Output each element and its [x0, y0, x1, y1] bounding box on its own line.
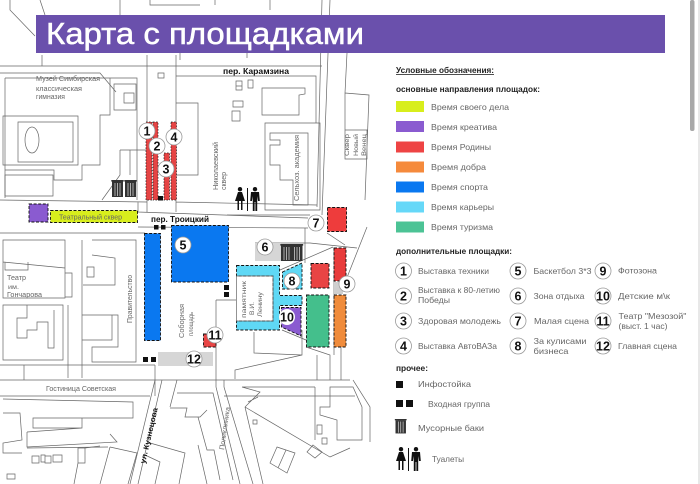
item 7: 7: [515, 314, 522, 328]
item 4: 4: [400, 340, 407, 354]
item 4: [396, 338, 497, 354]
right-centre roads: [227, 215, 367, 355]
zone: red small stage: [328, 208, 346, 232]
marker 7: [308, 215, 324, 231]
subheading: прочее:: [396, 364, 428, 373]
marker 11: 11: [208, 328, 222, 342]
item 2: [396, 285, 501, 305]
item 8: [510, 336, 587, 356]
item 6: [510, 288, 585, 304]
scrollbar: [690, 0, 700, 484]
theatre block: [3, 240, 72, 360]
item: bins: Мусорные баки: [418, 423, 484, 433]
item: motherland: [396, 142, 491, 152]
label: museum line 3: гимназия: [36, 94, 65, 101]
zone: blue square: [172, 226, 228, 282]
legend: other: [395, 364, 490, 471]
label: square Novy Venets: Сквер: [345, 133, 351, 156]
item 9: 9: [600, 264, 607, 278]
legend: additional sites: [396, 247, 686, 356]
item 3: [396, 313, 502, 329]
label: Novy: Новый: [353, 134, 360, 156]
item 1: 1: [400, 264, 407, 278]
zone: grey rest area: [255, 243, 281, 261]
zone: cyan career frame: [236, 266, 302, 330]
item: sport: [396, 182, 488, 192]
marker 6: [257, 239, 273, 255]
lower-left buildings: [3, 399, 185, 484]
item: career: Время карьеры: [431, 202, 494, 212]
item: own business: Время своего дела: [431, 102, 509, 112]
item 5: Баскетбол 3*3: [534, 266, 592, 276]
marker 1: 1: [144, 124, 151, 138]
label: museum line 2: классическая: [36, 86, 82, 93]
label: monument name: Ленину: [257, 291, 264, 317]
item: creative: Время креатива: [431, 122, 497, 132]
item 5: 5: [515, 264, 522, 278]
Nikolaevsky block: [176, 76, 316, 175]
zone: purple polygon: [282, 308, 301, 336]
info squares on map: [143, 196, 229, 362]
item: own business: [396, 101, 509, 112]
zone: red strips: [146, 122, 176, 200]
label: polyclinic: Поликлиника: [219, 407, 232, 450]
bottom roads: [0, 365, 350, 396]
item: tourism: [396, 222, 493, 232]
label: square word: площадь: [189, 312, 195, 336]
label: Kuznetsova street: ул. Кузнецова: [138, 406, 160, 464]
item: sport: Время спорта: [431, 182, 488, 192]
item 9: Фотозона: [618, 266, 657, 276]
item 3: Здоровая молодежь: [418, 316, 502, 326]
item 12: [595, 338, 677, 354]
marker 8: 8: [289, 274, 296, 288]
marker 7: 7: [313, 216, 320, 230]
item 7: Малая сцена: [534, 316, 589, 326]
marker 5: [175, 237, 191, 253]
icon: bins upper: [111, 180, 137, 197]
item 10: [595, 288, 670, 304]
title: [36, 15, 665, 53]
item 12: Главная сцена: [618, 341, 677, 351]
item 4: Выставка АвтоВАЗа: [418, 341, 497, 351]
zone: purple square: [29, 204, 48, 222]
item 2: Выставка к 80-летию: [418, 285, 501, 295]
marker 5: 5: [180, 238, 187, 252]
marker 3: [158, 161, 174, 177]
item: kindness: [396, 162, 486, 172]
item 10: 10: [596, 290, 610, 304]
marker 12: 12: [187, 352, 201, 366]
marker 6: 6: [262, 240, 269, 254]
lower-right block: [242, 387, 350, 484]
marker 4: [166, 129, 182, 145]
item 7: [510, 313, 589, 329]
marker 10: 10: [280, 310, 294, 324]
item 2: Победы: [418, 295, 450, 305]
label: hotel: Гостиница Советская: [46, 386, 116, 393]
legend: main directions: [396, 85, 540, 232]
item 9: [595, 263, 657, 279]
museum block: [5, 78, 137, 200]
icon: toilets on map: [235, 187, 260, 211]
subheading: основные направления площадок:: [396, 85, 540, 94]
item: toilets: Туалеты: [432, 454, 464, 464]
zone: red theatre: [204, 334, 216, 347]
marker 4: 4: [171, 130, 178, 144]
label: theatre: Театр: [7, 275, 26, 282]
marker 1: [139, 123, 155, 139]
label: theatre line 3: Гончарова: [7, 292, 42, 299]
label: agricultural academy: Сельхоз. академия: [294, 135, 301, 201]
zone: red right: [334, 248, 346, 281]
item: career: [396, 202, 494, 212]
label: monument box: [236, 276, 273, 321]
marker 2: [149, 138, 165, 154]
label: street Troitsky: пер. Троицкий: [151, 215, 209, 224]
item 6: 6: [515, 290, 522, 304]
numbered map markers: [139, 123, 355, 367]
map labels: [7, 67, 368, 464]
label: government: Правительство: [127, 275, 134, 323]
top area: [0, 0, 322, 92]
item 1: Выставка техники: [418, 266, 489, 276]
item 11: (выст. 1 час): [618, 321, 668, 331]
label: Teatralny skver: Театральный сквер: [59, 214, 122, 222]
item 12: 12: [596, 340, 610, 354]
item 2: 2: [400, 290, 407, 304]
subheading: дополнительные площадки:: [396, 247, 512, 256]
label: theatre line 2: им.: [8, 285, 19, 291]
marker 9: [339, 276, 355, 292]
item: info stand: Инфостойка: [418, 379, 471, 389]
marker 9: 9: [344, 278, 351, 292]
lower-centre buildings: [170, 393, 233, 484]
item 8: бизнеса: [534, 346, 569, 356]
marker 3: 3: [163, 162, 170, 176]
map base lines: [0, 0, 370, 484]
item: motherland: Время Родины: [431, 142, 491, 152]
label: square word: сквер: [221, 172, 228, 190]
label: Sobornaya: Соборная: [178, 304, 186, 338]
item: entrance group: Входная группа: [428, 399, 490, 409]
item 11: [595, 311, 686, 331]
zone: grey main stage: [158, 352, 213, 366]
item 6: Зона отдыха: [534, 291, 585, 301]
zone: red centre: [311, 264, 329, 288]
icon: bins lower: [280, 244, 303, 261]
label: street Karamzina: пер. Карамзина: [223, 67, 290, 76]
label: monument initials: В.И.: [250, 302, 256, 315]
label: monument: памятник: [241, 281, 248, 318]
legend heading: Условные обозначения:: [396, 66, 494, 75]
item 11: Театр "Мезозой": [618, 311, 686, 321]
item 3: 3: [400, 314, 407, 328]
zone: grey photo zone: [334, 282, 343, 294]
item 8: За кулисами: [534, 336, 587, 346]
title: Карта с площадками: [46, 16, 364, 51]
item 11: 11: [596, 314, 610, 328]
item 1: [396, 263, 489, 279]
label: Venets: Венец: [362, 133, 368, 156]
marker 8: [284, 273, 300, 289]
marker 2: 2: [154, 140, 161, 154]
label: museum: Музей Симбирская: [36, 75, 100, 83]
item 8: 8: [515, 340, 522, 354]
item 10: Детские м\к: [618, 291, 670, 301]
item: kindness: Время добра: [431, 162, 486, 172]
item: tourism: Время туризма: [431, 222, 493, 232]
item 5: [510, 263, 592, 279]
zone: green: [306, 295, 329, 347]
zone: blue long strip: [144, 234, 160, 340]
item: creative: [396, 121, 497, 132]
zone: orange: [334, 295, 346, 347]
zone: cyan triangle: [282, 263, 302, 289]
zone: yellow Teatralny skver: [50, 210, 138, 222]
label: Nikolaevsky square: Николаевский: [212, 142, 220, 190]
